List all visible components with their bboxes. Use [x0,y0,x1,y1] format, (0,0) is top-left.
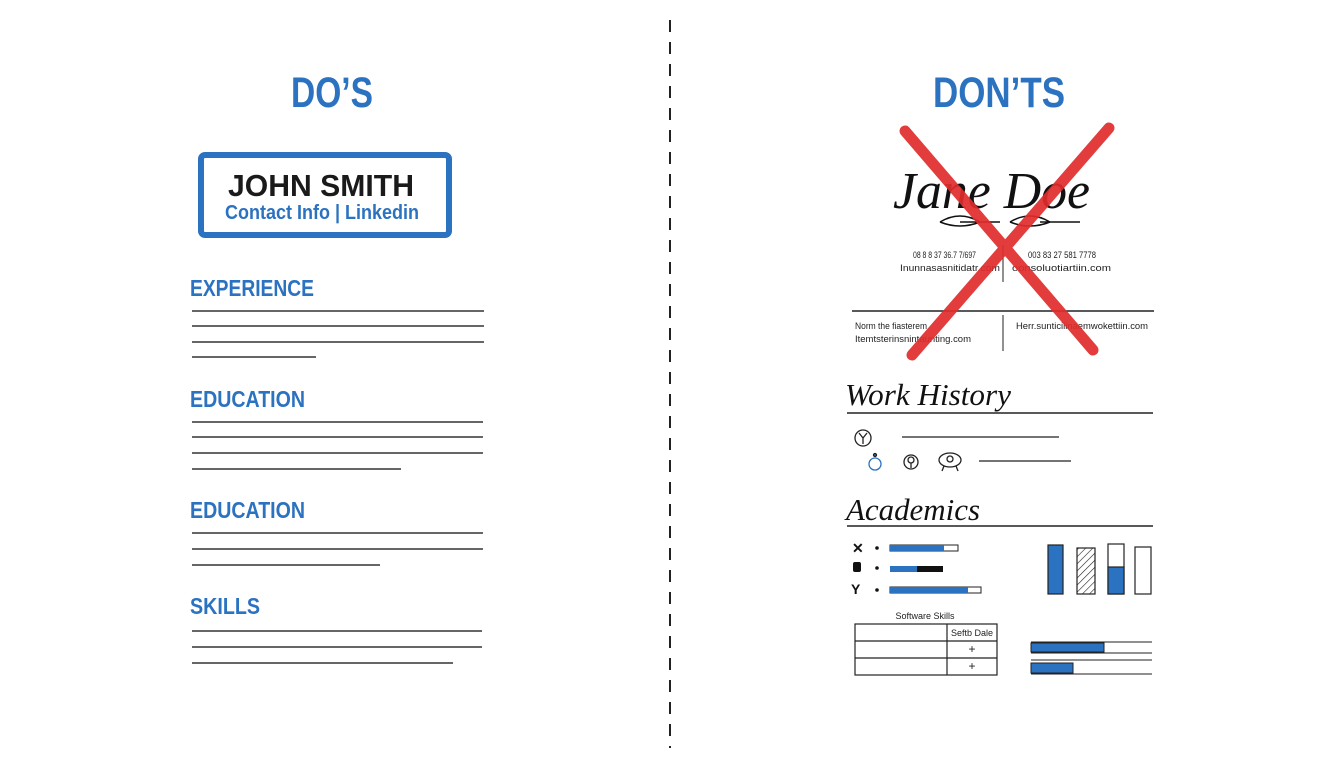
software skills table: Software Skills [895,611,955,621]
contact block [852,245,1154,351]
contact block: Inunnasasnitidatr.com [900,263,1000,273]
contact block: 003 83 27 581 7778 [1028,250,1096,260]
skill bars [851,540,981,597]
name box: JOHN SMITH [228,168,414,203]
script name: Jane Doe [893,163,1090,220]
heading: work history: Work History [845,377,1011,412]
section: education: EDUCATION [190,386,305,412]
software skills table: Seftb Dale [951,628,993,638]
section: skills: SKILLS [190,593,260,619]
contact block: oonsoluotiartiin.com [1012,263,1111,273]
contact block: Herr.sunticilinaemwokettiin.com [1016,321,1148,331]
name box [201,155,449,235]
icons: work history [855,430,1071,471]
vertical bar chart [1048,544,1151,594]
horizontal progress bars [1031,642,1152,674]
contact block: Itemtsterinsnintaunting.com [855,334,971,344]
software skills table [855,611,997,675]
heading: academics: Academics [844,492,980,527]
title: DON'TS: DON’TS [933,69,1065,117]
software skills table: + [968,659,976,673]
section: education 2: EDUCATION [190,497,305,523]
red cross [905,128,1109,355]
name box: Contact Info | Linkedin [225,202,419,224]
title: DO'S: DO’S [291,69,373,117]
skill bars: Y [851,581,861,597]
skill bars: ✕ [852,540,864,556]
panel: good resume [190,155,484,663]
section: experience: EXPERIENCE [190,275,314,301]
contact block: Norm the fiasterem [855,321,927,331]
contact block: 08 8 8 37 36.7 7/697 [913,250,976,260]
panel: bad resume [844,128,1154,675]
software skills table: + [968,642,976,656]
